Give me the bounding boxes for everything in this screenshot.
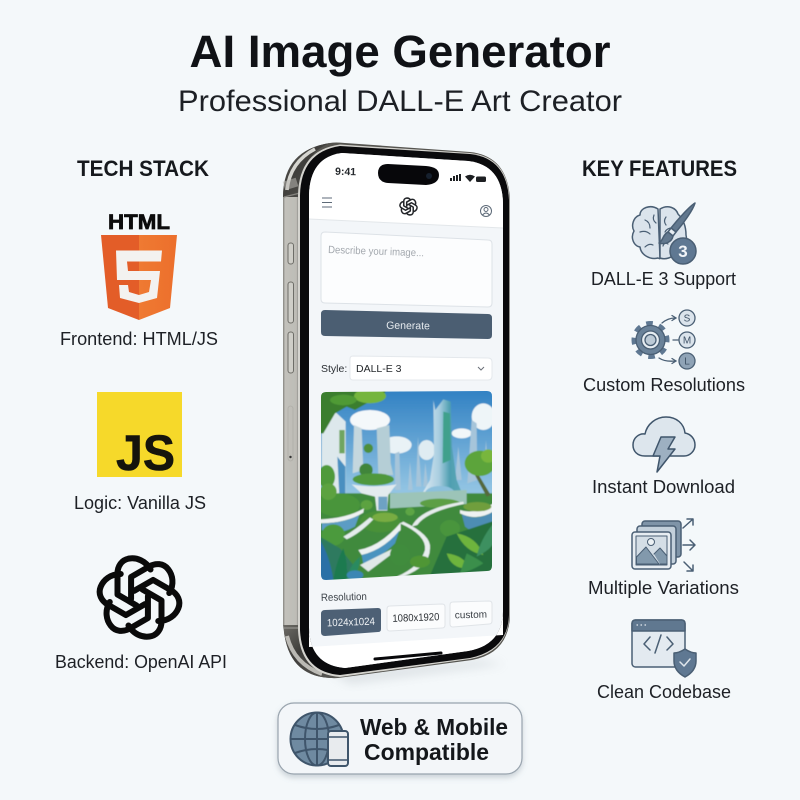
phone mockup	[283, 142, 510, 684]
label: clean codebase: Clean Codebase	[597, 682, 731, 702]
hamburger menu icon	[322, 198, 332, 207]
status and nav bar	[309, 153, 503, 228]
badge: web and mobile compatible	[278, 703, 522, 774]
icon: code window with shield	[632, 620, 696, 677]
gear size letters: M	[683, 336, 691, 346]
resolution label: Resolution	[321, 591, 367, 604]
frame chrome corners	[283, 143, 338, 678]
dropdown chevron	[478, 367, 484, 370]
label: frontend: Frontend: HTML/JS	[60, 329, 218, 349]
generate button	[321, 310, 492, 339]
prompt placeholder: Describe your image...	[328, 244, 424, 259]
icon: JS logo	[97, 392, 182, 481]
gear size letters: S	[684, 314, 691, 324]
bezel	[300, 146, 509, 675]
nav divider	[309, 219, 503, 228]
label: backend: Backend: OpenAI API	[55, 652, 227, 672]
label: custom resolutions: Custom Resolutions	[583, 375, 745, 395]
badge box	[278, 703, 522, 774]
generate label: Generate	[386, 320, 430, 332]
label: multiple variations: Multiple Variations	[588, 578, 739, 598]
badge text line one: Web & Mobile	[360, 714, 508, 740]
OpenAI nav icon	[399, 198, 418, 215]
prompt textarea	[321, 232, 492, 307]
chip: 1024x1024	[321, 608, 381, 636]
heading: tech stack: TECH STACK	[77, 156, 209, 181]
bezel trim	[298, 144, 510, 677]
icon: JS logo: JS	[116, 425, 175, 481]
screen	[309, 153, 503, 668]
chip: 1080x1920	[387, 604, 445, 631]
badge text line two: Compatible	[364, 739, 489, 765]
icon: stacked image variations	[632, 519, 695, 571]
profile icon	[480, 206, 492, 216]
icon: globe with phone	[290, 712, 348, 766]
phone frame	[283, 142, 510, 678]
icon: cloud with lightning	[633, 417, 695, 472]
icon: OpenAI logo	[95, 558, 184, 637]
label: instant download: Instant Download	[592, 477, 735, 497]
status icons	[450, 174, 486, 182]
label: DALL-E 3 support: DALL-E 3 Support	[591, 269, 736, 289]
home indicator	[375, 653, 441, 659]
style dropdown	[350, 356, 492, 380]
label: logic: Logic: Vanilla JS	[74, 493, 206, 513]
style value: DALL-E 3	[356, 363, 402, 375]
heading: key features: KEY FEATURES	[582, 156, 737, 181]
status time: 9:41	[335, 166, 356, 178]
panel: tech stack	[55, 156, 227, 672]
icon: HTML5 logo: HTML	[108, 211, 170, 234]
generated image: futuristic green city	[321, 391, 492, 580]
title: AI Image Generator	[190, 26, 610, 77]
dynamic island	[378, 164, 439, 185]
icon: gear with sizes	[630, 310, 695, 369]
subtitle: Professional DALL-E Art Creator	[178, 85, 622, 118]
chip: 1080x1920: 1080x1920	[392, 611, 440, 625]
icon: brain with paintbrush	[632, 203, 696, 264]
gear size letters	[683, 314, 691, 368]
chip: custom	[450, 601, 492, 627]
icon badge number 3: 3	[678, 242, 688, 261]
chip: custom: custom	[455, 610, 487, 621]
frame side band	[283, 197, 301, 625]
gear size letters: L	[684, 356, 690, 368]
icon: HTML5 logo	[101, 211, 177, 320]
panel: key features	[582, 156, 745, 702]
phone shadow	[330, 660, 505, 684]
chip: 1024x1024: 1024x1024	[327, 616, 375, 629]
home indicator area	[309, 612, 503, 668]
style label: Style:	[321, 363, 347, 375]
